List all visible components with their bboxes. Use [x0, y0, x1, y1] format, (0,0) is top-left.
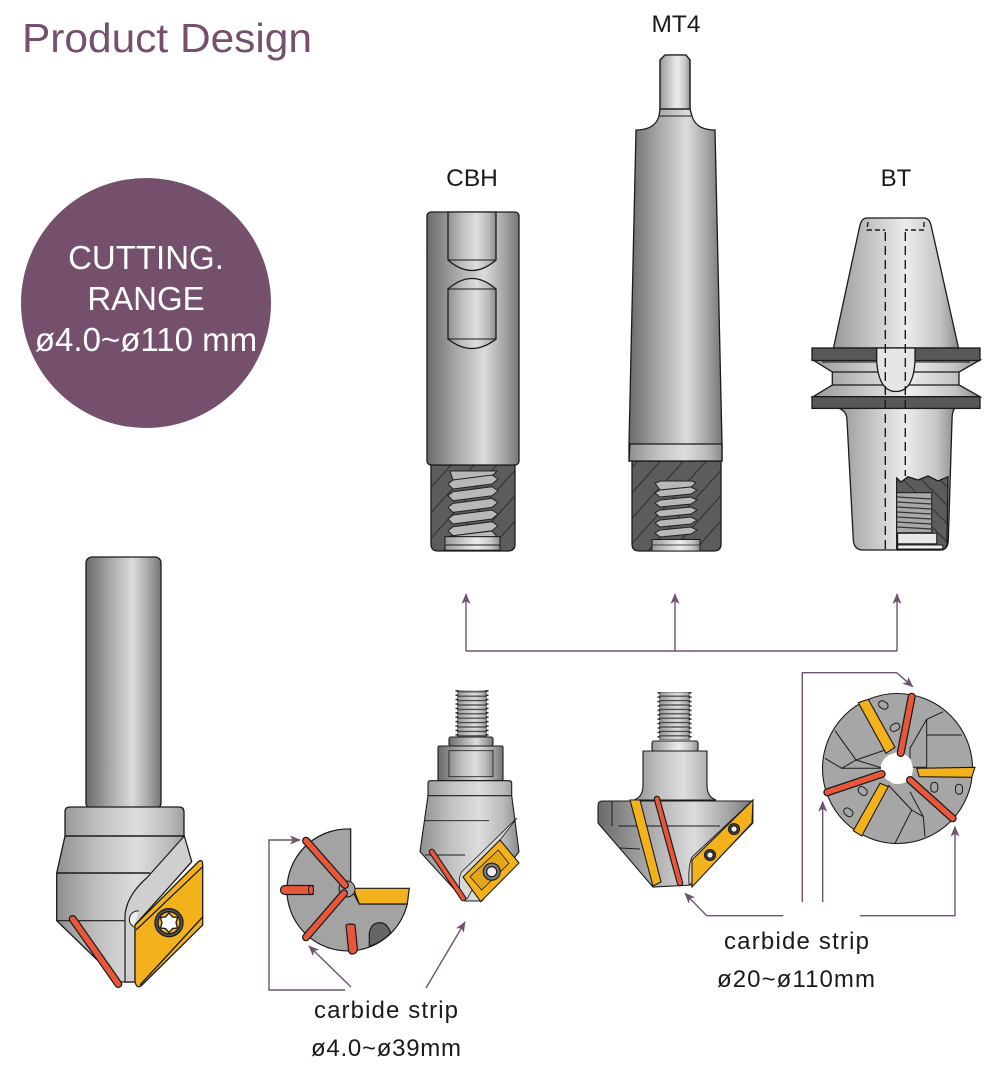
label: MT4: MT4 [652, 11, 700, 38]
icon: MT4 holder [629, 55, 722, 551]
arrows: small cutter callouts [269, 840, 465, 990]
icon: shank cutter [57, 557, 203, 987]
callout: cutting range circle: RANGE [87, 280, 205, 317]
title: Product Design [22, 15, 312, 61]
icon: large cutter side view [598, 692, 753, 887]
arrows: holder connections [466, 594, 897, 651]
icon: BT holder [812, 218, 980, 550]
icon: small indexable cutter [420, 690, 519, 902]
icon: CBH holder [427, 212, 519, 551]
label: large cutter range: ø20~ø110mm [717, 966, 875, 993]
callout: cutting range circle: ø4.0~ø110 mm [35, 321, 257, 358]
label: large cutter range: carbide strip [724, 928, 869, 955]
callout: cutting range circle: CUTTING. [68, 239, 224, 276]
arrows: large cutter callouts [685, 673, 955, 916]
label: CBH: CBH [446, 165, 498, 192]
label: BT: BT [881, 165, 912, 192]
label: large cutter range [717, 928, 875, 993]
icon: small cutter end view [280, 829, 409, 954]
label: small cutter range [311, 997, 461, 1062]
label: small cutter range: ø4.0~ø39mm [311, 1035, 461, 1062]
label: small cutter range: carbide strip [314, 997, 458, 1024]
icon: large cutter end view [822, 694, 975, 844]
callout: cutting range circle [21, 178, 271, 428]
